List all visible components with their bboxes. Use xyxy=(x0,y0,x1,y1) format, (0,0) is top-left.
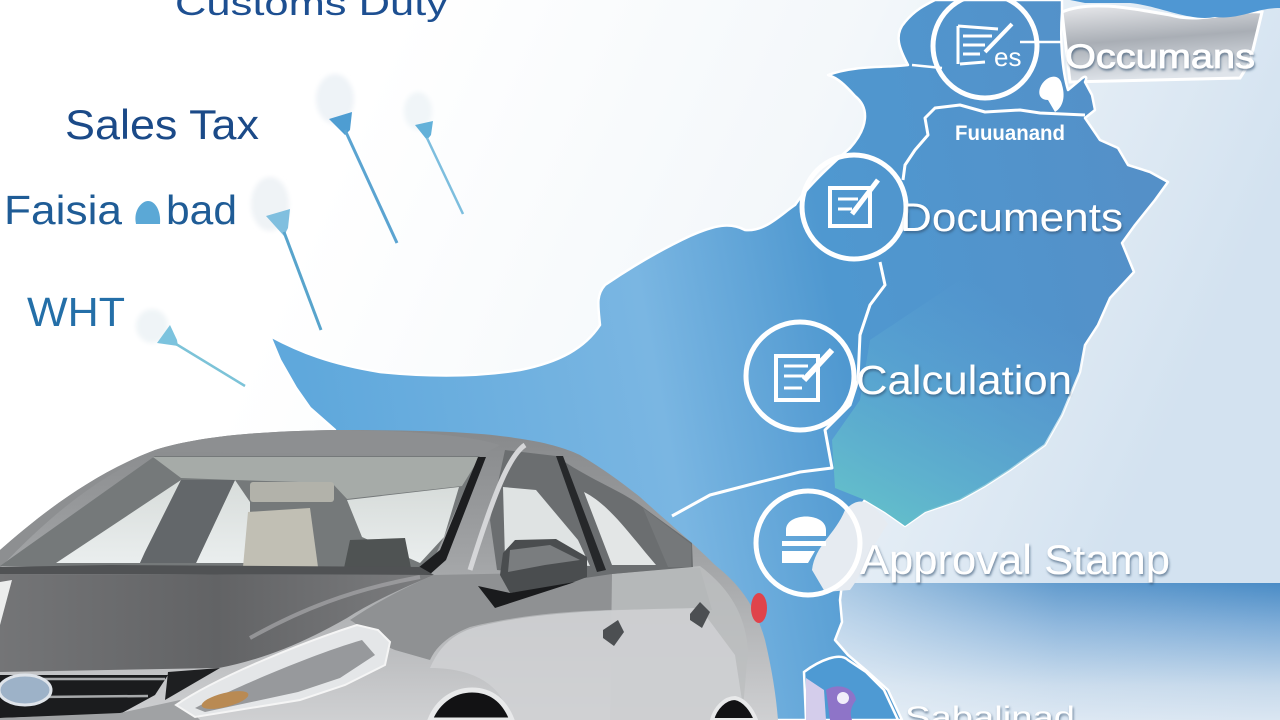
land mass xyxy=(270,0,1168,720)
fender and door upper panel xyxy=(350,568,712,660)
map of Pakistan xyxy=(270,0,1280,720)
hood crease xyxy=(250,577,420,638)
mirror base xyxy=(478,582,575,608)
island with purple figure xyxy=(804,657,898,720)
roof xyxy=(0,430,500,568)
seat right xyxy=(344,538,411,568)
rear door lighter panel xyxy=(610,566,748,720)
step: calculation icon xyxy=(746,322,854,430)
pin: sales tax xyxy=(404,92,463,214)
a pillar inner xyxy=(140,480,235,563)
step: documents icon xyxy=(802,155,906,259)
label: wht: WHT xyxy=(27,289,125,335)
hood highlight xyxy=(0,580,12,625)
rear wheel arch xyxy=(712,698,756,720)
quarter glass xyxy=(643,508,691,567)
seat left xyxy=(243,508,318,567)
cowl xyxy=(0,565,434,575)
pin: wht xyxy=(136,309,245,386)
teal lower province xyxy=(832,280,1098,526)
top right blue band xyxy=(1070,0,1280,18)
sea panel lower right xyxy=(835,583,1280,720)
door handle front xyxy=(603,620,624,646)
pin: faisalabad xyxy=(251,177,321,330)
badge xyxy=(0,675,51,705)
door handle rear xyxy=(690,602,710,628)
tail light xyxy=(751,593,767,623)
label: faisalabad xyxy=(4,187,237,233)
step: top customs icon: es xyxy=(994,42,1021,72)
indicator xyxy=(200,687,250,713)
step: top customs icon xyxy=(933,0,1037,98)
step: approval stamp icon xyxy=(756,491,860,595)
label: top region: Occumans xyxy=(1065,38,1255,76)
top right grey region xyxy=(1062,6,1262,82)
label: faisalabad: bad xyxy=(166,187,237,233)
body sheen xyxy=(430,608,745,720)
glass right xyxy=(347,487,459,563)
mirror highlight xyxy=(508,545,580,572)
front pillar bright edge xyxy=(470,445,525,570)
glass left xyxy=(56,480,181,563)
hood xyxy=(0,574,434,672)
grille xyxy=(0,675,168,718)
label: calculation: Calculation xyxy=(856,357,1072,403)
side window surround xyxy=(490,450,693,578)
side mirror xyxy=(500,539,587,593)
windshield upper tint xyxy=(153,457,480,499)
car body xyxy=(0,430,778,720)
pin: customs duty xyxy=(316,74,397,243)
front wheel arch xyxy=(430,690,512,720)
lower white coast blob xyxy=(812,502,888,592)
black a pillar xyxy=(418,457,486,576)
front door glass xyxy=(503,487,590,566)
faint top border xyxy=(912,42,1062,68)
headlight inner xyxy=(195,640,375,712)
door pillar xyxy=(556,456,606,572)
headlight xyxy=(176,625,390,717)
province borders xyxy=(672,105,1085,516)
lower nose xyxy=(0,700,200,720)
car xyxy=(0,430,778,720)
label: faisalabad: Faisia xyxy=(4,187,122,233)
black trim xyxy=(165,668,220,700)
grille bars xyxy=(40,679,165,697)
windshield interior xyxy=(0,456,480,572)
glass middle xyxy=(196,480,250,563)
label: small city: Fuuuanand xyxy=(955,122,1065,145)
label: approval stamp: Approval Stamp xyxy=(860,536,1170,583)
label: sales tax: Sales Tax xyxy=(65,101,259,148)
label: documents: Documents xyxy=(900,196,1123,240)
rear door glass xyxy=(584,492,656,565)
headrest mirror xyxy=(250,482,334,502)
white top right lake xyxy=(1039,77,1064,112)
